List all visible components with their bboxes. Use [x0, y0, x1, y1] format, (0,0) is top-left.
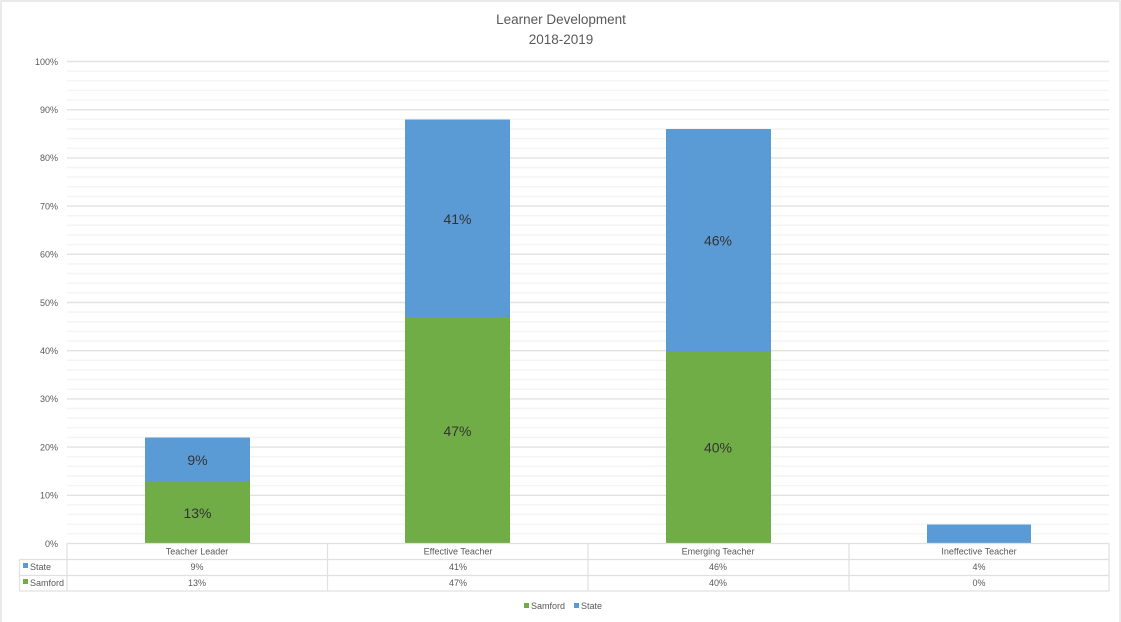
bar: Emerging Teacher [666, 129, 771, 544]
table row: Samford: Samford [30, 578, 64, 588]
bar: Ineffective Teacher [927, 524, 1031, 544]
table row: State [23, 562, 986, 572]
table row: Samford [23, 578, 986, 588]
bar: Effective Teacher: 47% [443, 423, 472, 439]
y axis labels: 40% [40, 346, 58, 356]
y axis labels: 80% [40, 153, 58, 163]
table row: State: 41% [449, 562, 467, 572]
bar: Effective Teacher [405, 120, 510, 544]
table row: Samford: 40% [709, 578, 727, 588]
table row: State: 9% [190, 562, 204, 572]
y axis labels: 100% [35, 57, 58, 67]
y axis labels: 0% [45, 539, 58, 549]
data table [20, 544, 1109, 591]
bar: Emerging Teacher: 40% [704, 440, 732, 456]
table row: categories: Teacher Leader [166, 546, 228, 556]
table row: State: 4% [972, 562, 986, 572]
y axis labels: 90% [40, 105, 58, 115]
table row: Samford: 0% [972, 578, 986, 588]
legend: State [581, 601, 602, 611]
y axis labels: 60% [40, 250, 58, 260]
table row: Samford: 47% [449, 578, 467, 588]
y axis labels [35, 57, 58, 549]
table row: categories: Effective Teacher [424, 546, 492, 556]
table row: categories: Ineffective Teacher [941, 546, 1017, 556]
bar: Emerging Teacher: 46% [704, 232, 732, 248]
y axis labels: 30% [40, 394, 58, 404]
title: Learner Development [496, 12, 626, 27]
y axis labels: 10% [40, 490, 58, 500]
table row: categories: Emerging Teacher [682, 546, 754, 556]
table row: State: 46% [709, 562, 727, 572]
legend: Samford [531, 601, 565, 611]
y axis labels: 70% [40, 202, 58, 212]
table row: categories [166, 546, 1017, 556]
title: 2018-2019 [529, 32, 593, 47]
title [496, 12, 626, 47]
bar: Teacher Leader: 9% [187, 452, 208, 468]
table row: State: State [30, 562, 51, 572]
y axis labels: 50% [40, 298, 58, 308]
bar: Effective Teacher: 41% [443, 211, 472, 227]
legend [524, 601, 602, 611]
bar: Teacher Leader [145, 438, 250, 544]
bar: Teacher Leader: 13% [183, 505, 212, 521]
table row: Samford: 13% [188, 578, 206, 588]
y axis labels: 20% [40, 442, 58, 452]
